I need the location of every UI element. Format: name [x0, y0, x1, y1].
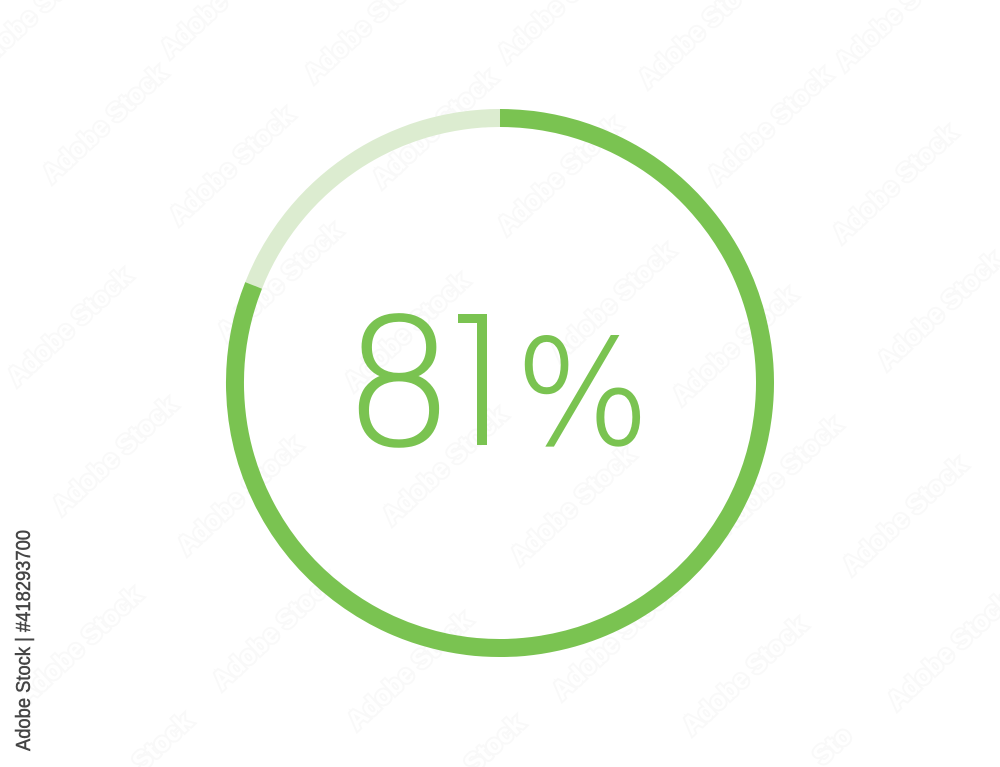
- background watermark: Adobe Stock: [366, 63, 503, 194]
- infographic canvas: [14, 109, 774, 752]
- ring: remaining 19% track: [254, 118, 500, 285]
- background watermark: Adobe Stock: [491, 110, 628, 241]
- background watermark: Adobe Stock: [338, 266, 475, 397]
- background watermark: Adobe Stock: [544, 236, 681, 367]
- stock image id label: Adobe Stock | #418293700: [13, 530, 35, 751]
- background watermark: Adobe Stock: [206, 565, 343, 696]
- digit 1: 1: [416, 282, 528, 487]
- digit 1: [458, 314, 487, 445]
- background watermark: Adobe Stock: [376, 400, 513, 531]
- background watermark: Adobe Stock: [826, 118, 963, 249]
- percent sign: %: [515, 309, 650, 479]
- background watermark: Adobe Stock: [163, 100, 300, 231]
- background watermark: Adobe Stock: [504, 440, 641, 571]
- progress ring: [235, 118, 765, 648]
- percentage value: [358, 313, 640, 448]
- background watermark: Adobe Stock: [836, 450, 973, 581]
- background watermark: Adobe Stock: [11, 580, 148, 711]
- background watermark: Adobe Stock: [711, 410, 848, 541]
- background watermark: Adobe Stock: [1, 261, 138, 392]
- background watermark: Adobe Stock: [666, 280, 803, 411]
- background watermark: Adobe Stock: [341, 605, 478, 736]
- background watermark: Adobe Stock: [701, 60, 838, 191]
- digit 8: 8: [343, 282, 455, 486]
- background watermark: Adobe Stock: [211, 216, 348, 347]
- background watermark: Adobe Stock: [46, 390, 183, 521]
- background watermark: Adobe Stock: [676, 610, 813, 741]
- background watermark: Adobe Stock: [546, 575, 683, 706]
- background watermark: Adobe Stock: [171, 430, 308, 561]
- ring: filled 81% arc: [235, 118, 765, 648]
- background watermark: Adobe Stock: [36, 58, 173, 189]
